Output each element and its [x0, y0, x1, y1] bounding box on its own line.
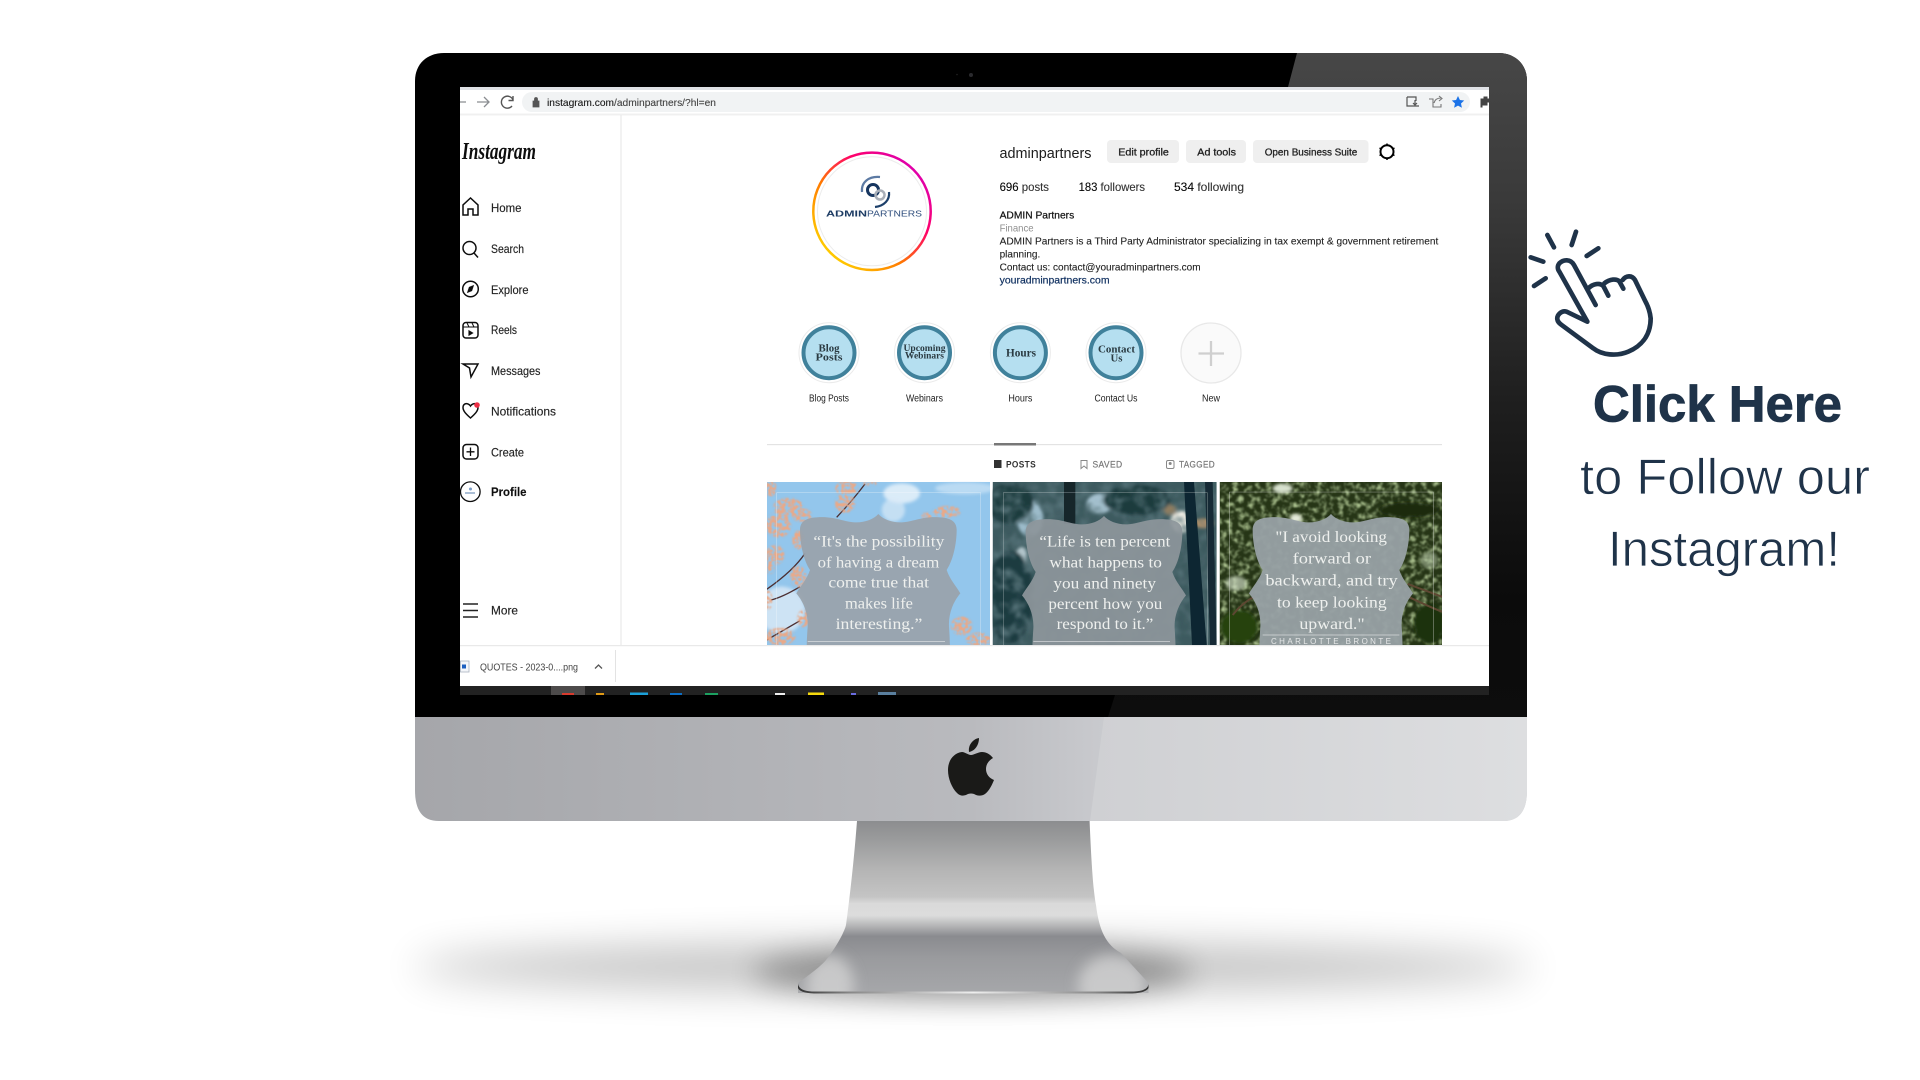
icon: settings gear	[1380, 144, 1394, 160]
post: tree canopy quote: "I avoid looking	[1275, 529, 1387, 546]
nav item: notifications: Notifications	[491, 404, 556, 418]
nav item: search: Search	[491, 242, 524, 256]
logo: wordmark	[826, 209, 922, 219]
nav item: more: More	[491, 604, 518, 618]
post: tree canopy quote: to keep looking	[1277, 595, 1387, 612]
profile bio: Finance	[1000, 222, 1034, 234]
highlight: hours	[990, 323, 1050, 404]
monitor stand	[798, 821, 1148, 994]
button: edit profile	[1107, 140, 1179, 163]
button: open business suite: Open Business Suite	[1265, 146, 1357, 158]
profile stats: 696 posts	[1000, 180, 1049, 194]
call to action line 3: Instagram!	[1608, 521, 1840, 577]
browser toolbar: instagram.com/adminpartners/?hl=en	[547, 97, 716, 109]
highlight: contact us: Us	[1110, 353, 1123, 365]
tab: saved	[1081, 460, 1122, 470]
post: forest quote	[992, 482, 1217, 645]
nav item: messages	[463, 364, 540, 378]
highlight: contact us: Contact	[1098, 344, 1135, 356]
nav item: explore: Explore	[491, 283, 529, 297]
floor shadow	[413, 943, 1533, 998]
highlight: blog posts: Blog Posts	[809, 394, 849, 404]
profile picture	[813, 153, 931, 270]
post: forest quote: “Life is ten percent	[1039, 534, 1171, 551]
highlight: blog posts: Blog	[818, 343, 840, 355]
monitor bezel	[415, 53, 1527, 717]
nav item: home: Home	[491, 201, 522, 215]
profile stats: 183 followers	[1079, 180, 1145, 194]
button: ad tools: Ad tools	[1197, 146, 1236, 158]
tab: tagged: TAGGED	[1179, 460, 1215, 470]
nav item: more	[463, 604, 518, 618]
highlight: webinars: Upcoming	[904, 344, 946, 354]
profile bio: ADMIN Partners is a Third Party Administrator specializing in tax exempt & government retirement	[1000, 236, 1438, 248]
call to action heading: Click Here	[1593, 376, 1842, 433]
profile bio: youradminpartners.com	[1000, 274, 1110, 286]
post: tree canopy quote: upward."	[1299, 616, 1365, 633]
call to action line 2: to Follow our	[1580, 449, 1870, 505]
highlight: blog posts: Posts	[816, 352, 843, 364]
nav item: reels	[463, 322, 517, 338]
highlight: blog posts	[799, 323, 859, 404]
highlight: webinars: Webinars	[906, 394, 943, 404]
tab: saved: SAVED	[1092, 460, 1122, 470]
browser screen	[460, 87, 1489, 695]
button: open business suite	[1253, 140, 1368, 163]
post: tree canopy quote: CHARLOTTE BRONTE	[1271, 637, 1391, 646]
instagram wordmark: Instagram	[461, 139, 536, 165]
logo: wordmark: PARTNERS	[867, 209, 922, 219]
post: blossom quote: interesting.”	[836, 616, 922, 633]
nav item: profile	[460, 482, 527, 502]
profile stats	[1000, 180, 1244, 194]
profile bio	[1000, 210, 1438, 286]
story highlights	[799, 323, 1241, 404]
post: forest quote: respond to it.”	[1057, 616, 1153, 633]
profile bio: planning.	[1000, 248, 1040, 260]
nav item: create	[463, 444, 524, 460]
post: blossom quote: “It's the possibility	[813, 534, 944, 551]
logo: swirl mark	[862, 177, 889, 207]
post: blossom quote: makes life	[845, 595, 913, 612]
nav item: search	[463, 242, 524, 258]
post: tree canopy quote: backward, and try	[1265, 573, 1398, 590]
windows taskbar	[460, 686, 1489, 695]
download shelf	[460, 645, 1489, 686]
highlight: contact us: Contact Us	[1094, 394, 1138, 404]
username: adminpartners	[1000, 146, 1092, 162]
post: blossom quote	[758, 480, 995, 659]
icon: tapping hand	[1531, 232, 1651, 355]
post: forest quote: percent how you	[1048, 596, 1162, 613]
button: edit profile: Edit profile	[1118, 146, 1169, 158]
post: tree canopy quote	[1220, 482, 1444, 659]
sidebar divider	[620, 115, 622, 645]
highlight: new	[1181, 323, 1241, 404]
post: forest quote: what happens to	[1049, 554, 1162, 571]
post: blossom quote: come true that	[828, 575, 930, 592]
nav item: messages: Messages	[491, 364, 540, 378]
nav item: profile: Profile	[491, 485, 527, 499]
nav item: reels: Reels	[491, 323, 517, 337]
post: forest quote: you and ninety	[1053, 575, 1156, 592]
download shelf: QUOTES - 2023-0....png	[480, 662, 578, 673]
tab: posts	[994, 460, 1036, 470]
nav item: create: Create	[491, 446, 524, 460]
highlight: webinars	[894, 323, 954, 404]
highlight: webinars: Webinars	[905, 352, 944, 362]
highlight: hours: Hours	[1008, 394, 1032, 404]
nav item: home	[463, 198, 522, 215]
highlight: contact us	[1086, 323, 1146, 404]
highlight: new: New	[1202, 394, 1221, 404]
button: ad tools	[1186, 140, 1246, 163]
post: tree canopy quote: forward or	[1293, 550, 1372, 567]
nav item: notifications	[463, 402, 556, 418]
profile bio: Contact us: contact@youradminpartners.com	[1000, 262, 1201, 274]
nav item: explore	[463, 281, 529, 297]
browser toolbar	[460, 87, 1489, 116]
profile stats: 534 following	[1174, 180, 1244, 194]
sidebar navigation	[460, 198, 556, 618]
profile header	[1000, 140, 1438, 286]
profile tabs	[767, 443, 1442, 470]
post: blossom quote: of having a dream	[818, 554, 940, 571]
profile bio: ADMIN Partners	[1000, 210, 1074, 222]
icon: apple logo	[948, 738, 994, 796]
tab: posts: POSTS	[1006, 460, 1036, 470]
tab: tagged	[1166, 460, 1215, 470]
logo: wordmark: ADMIN	[826, 209, 867, 219]
highlight: hours: Hours	[1006, 348, 1037, 360]
monitor chin	[415, 717, 1527, 821]
